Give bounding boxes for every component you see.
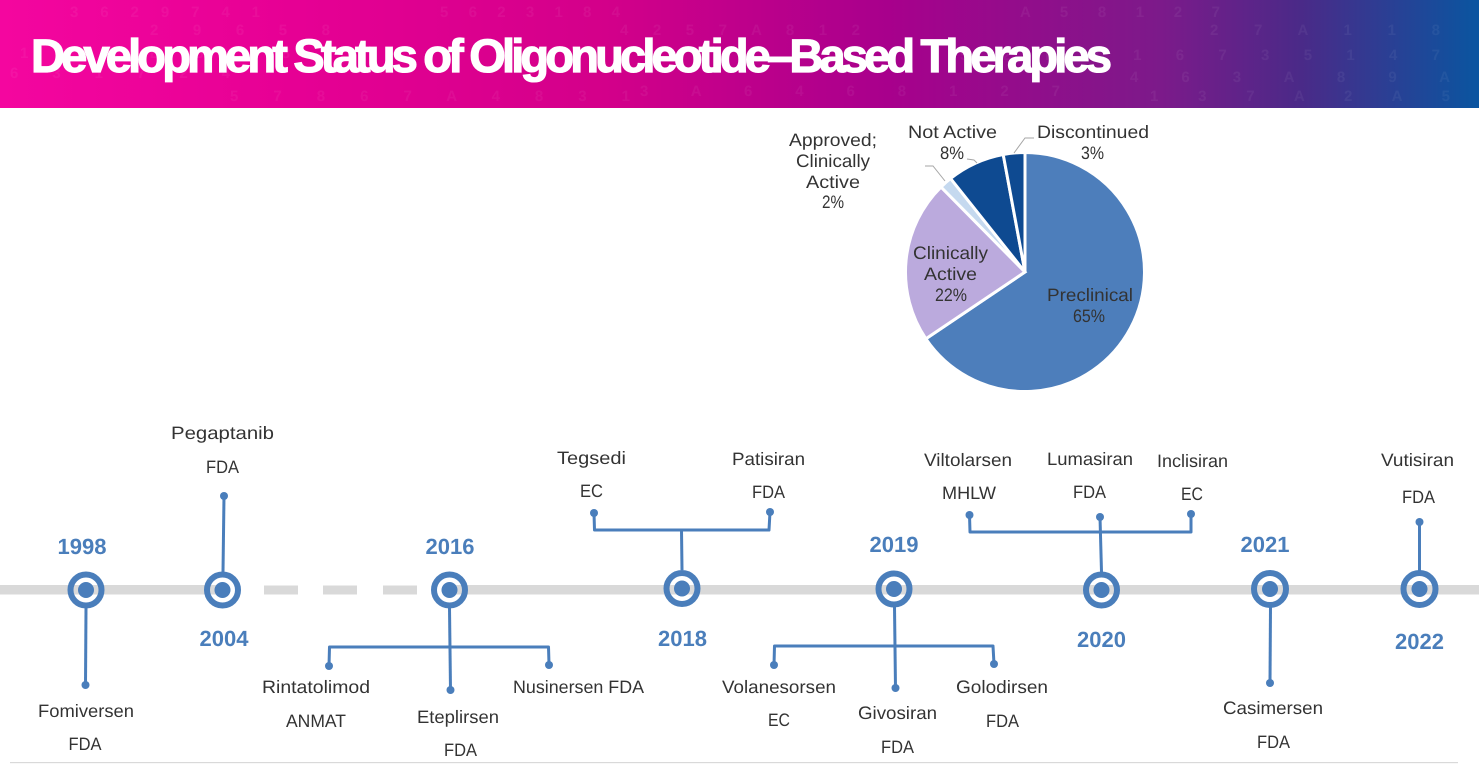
label: Rintatolimod ANMAT: Rintatolimod [262, 677, 370, 697]
milestone 2004 [171, 423, 274, 651]
header banner: 5 2 B 8 1 6 7 3 5 1 4 7 [960, 47, 1440, 64]
label: Inclisiran EC: Inclisiran [1157, 451, 1228, 471]
label: Lumasiran FDA: FDA [1073, 482, 1106, 502]
pie label: Clinically Active 22% [913, 243, 988, 305]
header banner: 1 3 7 A 2 A 5 [1150, 88, 1450, 105]
pie label: Approved; Clinically Active 2%: Active [806, 172, 860, 192]
label: Pegaptanib FDA: FDA [206, 457, 239, 477]
header banner: 4 2 5 7 A 8 1 2 [620, 22, 860, 39]
label: Inclisiran EC: EC [1181, 484, 1203, 504]
label: Lumasiran FDA [1047, 449, 1133, 502]
label: Golodirsen FDA [956, 677, 1048, 731]
label: Tegsedi EC [557, 448, 626, 501]
label: Volanesorsen EC: Volanesorsen [722, 677, 836, 697]
header banner: 2 7 A 1 1 8 [1210, 22, 1440, 39]
label: Vutisiran FDA: Vutisiran [1381, 450, 1454, 470]
label: Casimersen FDA: FDA [1257, 732, 1290, 752]
label: Casimersen FDA [1223, 698, 1323, 752]
label: Golodirsen FDA: FDA [986, 711, 1019, 731]
label: Eteplirsen FDA: Eteplirsen [417, 707, 499, 727]
milestone 2020 [924, 449, 1228, 652]
header banner: 3 6 2 9 7 4 1 [70, 4, 260, 21]
milestone 2018: 2018 [658, 626, 707, 651]
label: Patisiran FDA: Patisiran [732, 449, 805, 469]
label: Fomiversen FDA: FDA [68, 734, 102, 754]
milestone 2004: 2004 [200, 626, 249, 651]
label: Volanesorsen EC [722, 677, 836, 730]
leader line: Approved [925, 166, 945, 181]
milestone 1998: 1998 [58, 534, 106, 559]
label: Givosiran FDA: FDA [881, 737, 914, 757]
label: Tegsedi EC: Tegsedi [557, 448, 626, 468]
pie label: Clinically Active 22%: Active [924, 264, 977, 284]
label: Vutisiran FDA [1381, 450, 1454, 507]
pie label: Approved; Clinically Active 2%: 2% [822, 192, 844, 212]
label: Casimersen FDA: Casimersen [1223, 698, 1323, 718]
header banner: 3 A 6 4 6 8 1 2 7 [640, 83, 1060, 100]
label: Nusinersen FDA: Nusinersen FDA [513, 677, 644, 697]
pie chart: development status [905, 152, 1144, 392]
header banner: 4 6 3 A 8 9 A [1130, 69, 1450, 86]
milestone 2016 [262, 534, 644, 760]
pie label: Clinically Active 22%: Clinically [913, 243, 988, 263]
label: Fomiversen FDA [38, 701, 134, 754]
milestone 2022: 2022 [1395, 629, 1444, 654]
slice: Not Active 8% [951, 154, 1025, 272]
header banner: 5 7 8 6 7 A 4 8 3 1 [230, 88, 630, 105]
slice: Approved; Clinically Active 2% [941, 178, 1025, 272]
slice: Clinically Active 22% [905, 187, 1025, 339]
header banner: A 5 8 1 2 7 [1020, 4, 1220, 21]
slice: Discontinued 3% [1003, 152, 1025, 272]
slice: Preclinical 65% [926, 152, 1144, 392]
milestone 2019: 2019 [870, 532, 918, 557]
header banner [0, 0, 1479, 108]
label: Vutisiran FDA: FDA [1402, 487, 1435, 507]
label: Givosiran FDA: Givosiran [858, 703, 937, 723]
label: Patisiran FDA [732, 449, 805, 502]
pie label: Preclinical 65% [1047, 285, 1133, 326]
label: Patisiran FDA: FDA [752, 482, 785, 502]
leader line: Not Active [967, 159, 977, 163]
label: Inclisiran EC [1157, 451, 1228, 504]
label: Pegaptanib FDA: Pegaptanib [171, 423, 274, 443]
bottom rule [10, 762, 1458, 763]
label: Rintatolimod ANMAT [262, 677, 370, 731]
pie label: Not Active 8% [908, 122, 997, 163]
label: Viltolarsen MHLW: MHLW [942, 483, 996, 503]
pie label: Not Active 8%: Not Active [908, 122, 997, 142]
pie label: Approved; Clinically Active 2% [789, 130, 877, 212]
milestone 2020: 2020 [1077, 627, 1126, 652]
milestone 2022 [1381, 450, 1454, 654]
milestone 2021: 2021 [1241, 532, 1289, 557]
milestone 2018 [557, 448, 805, 651]
title: Development Status of Oligonucleotide–Based Therapies [31, 29, 1112, 82]
pie label: Discontinued 3% [1037, 122, 1149, 163]
label: Rintatolimod ANMAT: ANMAT [286, 711, 346, 731]
pie label: Approved; Clinically Active 2%: Approved; [789, 130, 877, 150]
header banner: 2 9 6 5 8 [150, 22, 330, 39]
label: Eteplirsen FDA: FDA [444, 740, 477, 760]
label: Pegaptanib FDA [171, 423, 274, 477]
timeline axis [0, 585, 1479, 594]
pie label: Preclinical 65%: Preclinical [1047, 285, 1133, 305]
pie label: Discontinued 3%: Discontinued [1037, 122, 1149, 142]
label: Golodirsen FDA: Golodirsen [956, 677, 1048, 697]
label: Givosiran FDA [858, 703, 937, 757]
label: Viltolarsen MHLW: Viltolarsen [924, 450, 1012, 470]
milestone 2021 [1223, 532, 1323, 752]
pie label: Not Active 8%: 8% [940, 143, 964, 163]
pie label: Clinically Active 22%: 22% [935, 285, 967, 305]
leader line: Discontinued [1014, 138, 1034, 153]
label: Tegsedi EC: EC [580, 481, 603, 501]
header banner: 1 9 5 B 6 3 8 [20, 45, 290, 62]
header banner: 5 6 2 3 1 8 4 [440, 4, 621, 21]
pie label: Preclinical 65%: 65% [1073, 306, 1105, 326]
pie label: Approved; Clinically Active 2%: Clinically [796, 151, 870, 171]
label: Volanesorsen EC: EC [768, 710, 790, 730]
milestone 2016: 2016 [426, 534, 474, 559]
label: Fomiversen FDA: Fomiversen [38, 701, 134, 721]
header banner: 6 3 1 7 2 4 [10, 65, 231, 82]
milestone 1998 [38, 534, 134, 754]
label: Lumasiran FDA: Lumasiran [1047, 449, 1133, 469]
label: Eteplirsen FDA [417, 707, 499, 760]
pie label: Discontinued 3%: 3% [1081, 143, 1104, 163]
milestone 2019 [722, 532, 1048, 757]
label: Viltolarsen MHLW [924, 450, 1012, 503]
